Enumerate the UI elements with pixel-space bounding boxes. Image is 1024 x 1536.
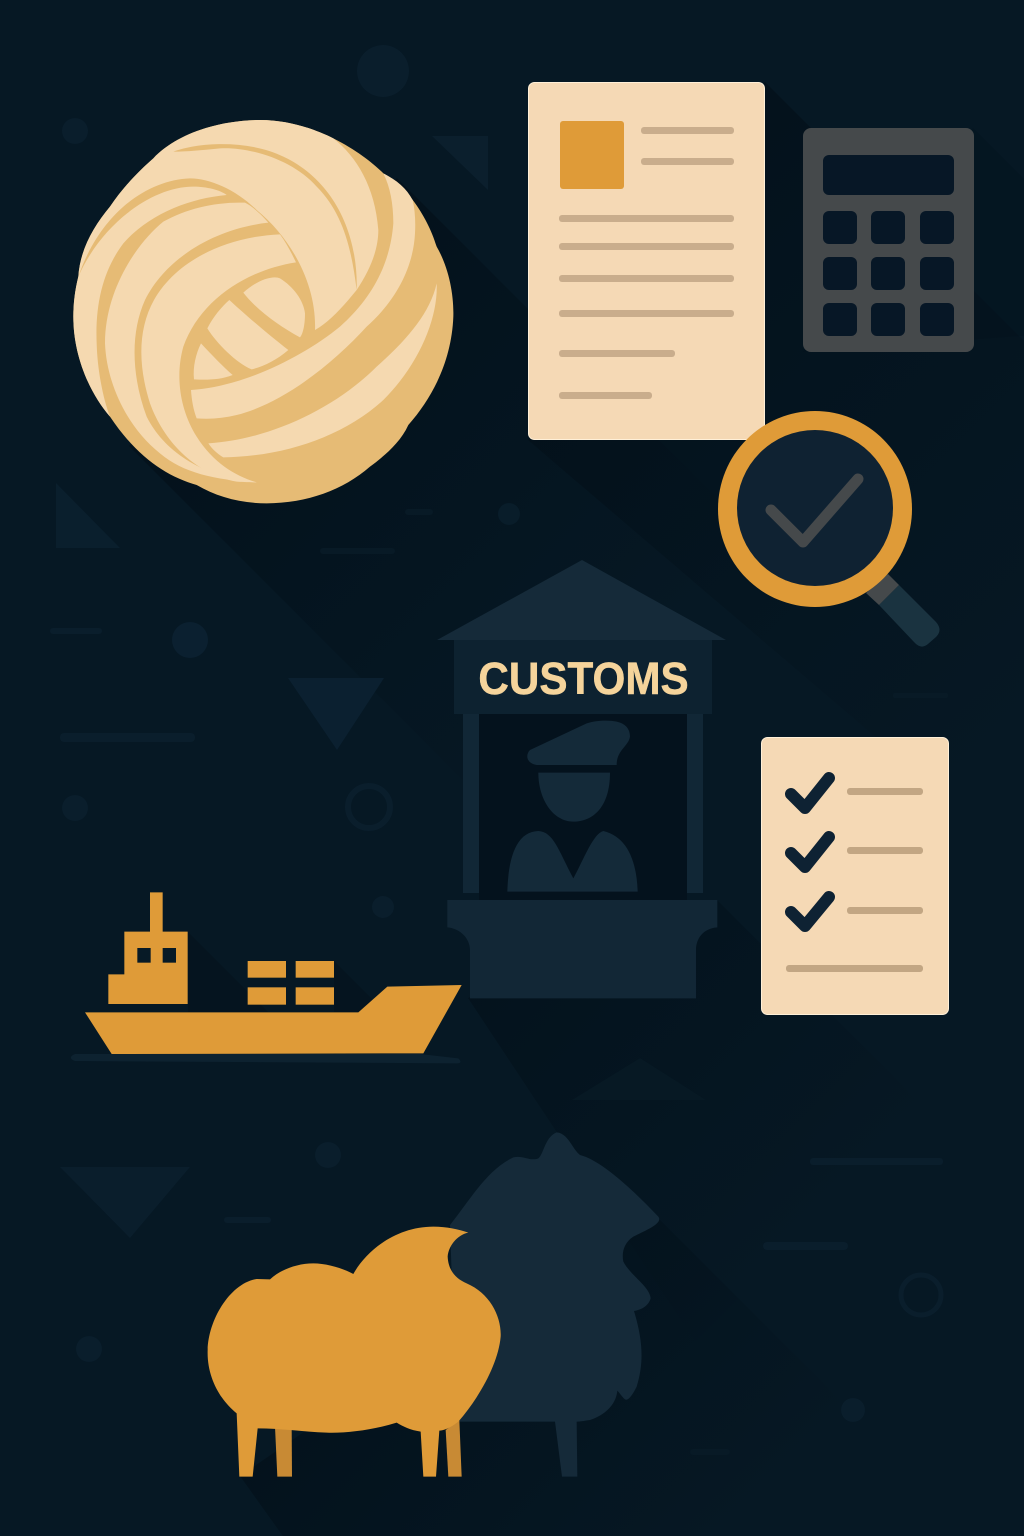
orange sheep back legs [275, 1420, 462, 1477]
ship containers [248, 961, 334, 1005]
icon: calculator [803, 128, 974, 352]
icon: customs document [528, 82, 764, 440]
icon: checklist [762, 738, 948, 1014]
document text lines [559, 127, 734, 399]
ship cabin windows [137, 948, 176, 963]
ship waterline [71, 1054, 460, 1063]
calculator display [823, 155, 954, 195]
document orange photo block [560, 121, 624, 189]
checklist check marks [791, 778, 829, 926]
icon: customs booth [437, 560, 726, 998]
icon: cargo ship [71, 892, 462, 1063]
dark sheep [450, 1132, 659, 1477]
ship cabin and funnel [108, 892, 188, 1004]
checklist lines [786, 788, 923, 972]
booth sign panel [454, 640, 712, 714]
ship hull [85, 985, 462, 1054]
booth interior [479, 713, 687, 900]
booth roof [437, 560, 726, 640]
calculator keys [823, 211, 954, 336]
orange sheep [208, 1227, 501, 1477]
booth counter [447, 900, 717, 998]
icon: two sheep silhouettes [208, 1132, 659, 1477]
icon: magnifying glass with check [718, 411, 940, 647]
icon: ball of wool yarn [73, 120, 453, 503]
booth posts [463, 714, 703, 893]
booth sign text: CUSTOMS [478, 654, 689, 704]
customs officer figure [507, 721, 638, 892]
